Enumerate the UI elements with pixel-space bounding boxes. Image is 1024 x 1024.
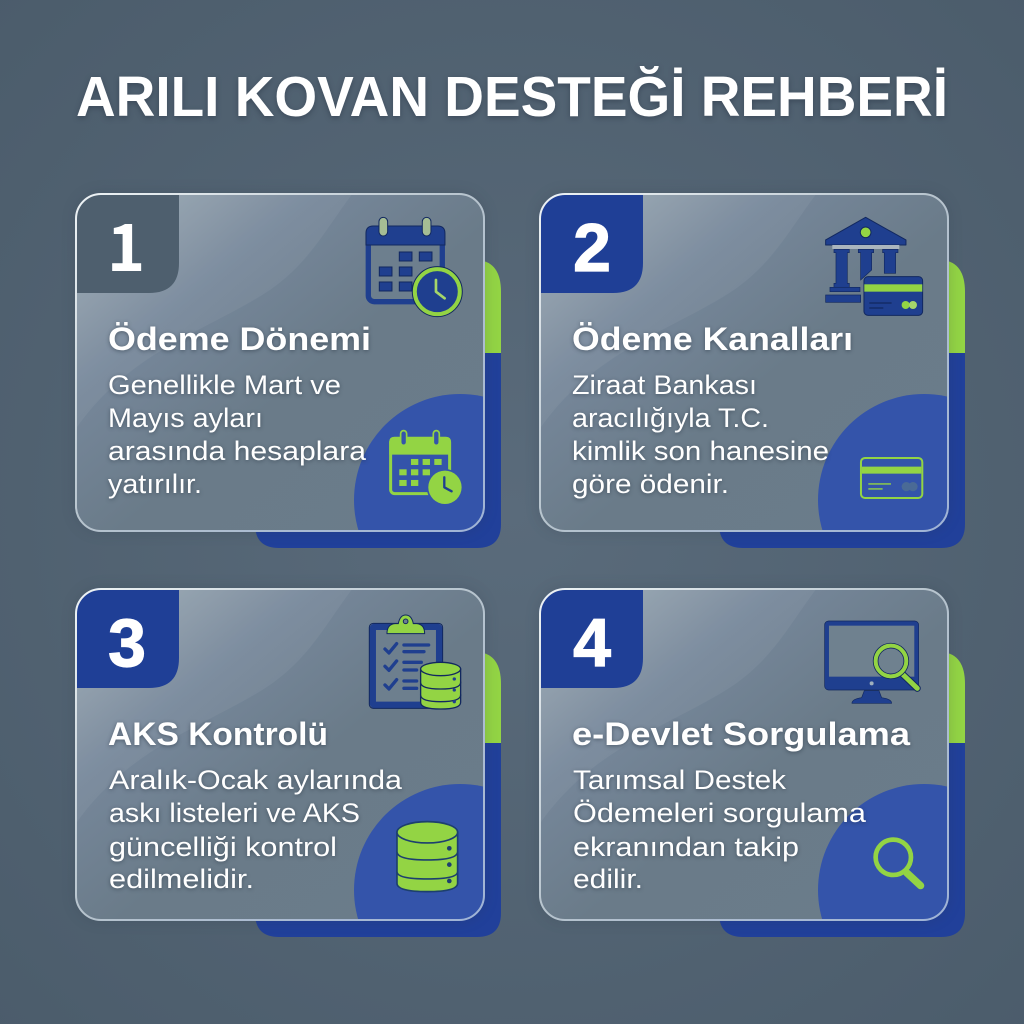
body text 3: güncelliği kontrol xyxy=(109,832,337,862)
decor circle 3 xyxy=(354,784,483,919)
body text 4: Tarımsal Destek xyxy=(573,765,787,795)
body text 4: ekranından takip xyxy=(573,832,799,862)
body text 1: Mayıs ayları xyxy=(108,403,263,433)
decor circle 2 xyxy=(818,394,947,530)
body text 1: arasında hesaplara xyxy=(108,436,366,466)
body text 2 xyxy=(572,370,829,499)
glass card 2 xyxy=(539,193,949,532)
back plate 4 xyxy=(719,652,965,937)
back plate 2 xyxy=(719,260,965,548)
number badge 1 xyxy=(75,193,179,293)
body text 3 xyxy=(109,765,402,894)
body text 3: askı listeleri ve AKS xyxy=(109,798,360,828)
number badge 4 xyxy=(539,588,643,688)
body text 4 xyxy=(573,765,866,894)
icon: green credit card xyxy=(861,458,922,498)
heading 1: Ödeme Dönemi xyxy=(108,321,371,357)
title: ARILI KOVAN DESTEĞİ REHBERİ xyxy=(76,65,948,129)
glass card 4 xyxy=(539,588,949,921)
number badge 1: 1 xyxy=(107,196,145,290)
body text 3: edilmelidir. xyxy=(109,864,254,894)
body text 2: kimlik son hanesine xyxy=(572,436,829,466)
decor circle 1 xyxy=(354,394,483,530)
card border 1 xyxy=(76,194,484,531)
panel: card 4 xyxy=(539,588,965,937)
body text 3: Aralık-Ocak aylarında xyxy=(109,765,402,795)
panel: card 3 xyxy=(75,588,501,937)
glass card 3 xyxy=(75,588,485,921)
icon: clipboard with database xyxy=(369,615,461,709)
body text 1 xyxy=(108,370,366,499)
icon: bank and credit card xyxy=(826,217,923,315)
panel: card 2 xyxy=(539,193,965,548)
heading 2: Ödeme Kanalları xyxy=(572,321,853,357)
body text 2: aracılığıyla T.C. xyxy=(572,403,769,433)
number badge 2 xyxy=(539,193,643,293)
card border 4 xyxy=(540,589,948,920)
number badge 3: 3 xyxy=(108,605,146,681)
heading 3: AKS Kontrolü xyxy=(108,716,328,752)
heading 4: e-Devlet Sorgulama xyxy=(572,716,910,752)
number badge 3 xyxy=(75,588,179,688)
body text 1: yatırılır. xyxy=(108,469,202,499)
body text 2: göre ödenir. xyxy=(572,469,729,499)
icon: green calendar xyxy=(389,431,463,506)
panel: card 1 xyxy=(75,193,501,548)
icon: green magnifier xyxy=(876,840,921,886)
card border 2 xyxy=(540,194,948,531)
back plate 3 xyxy=(255,652,501,937)
icon: monitor with magnifier xyxy=(825,621,919,703)
glass card 1 xyxy=(75,193,485,532)
body text 4: Ödemeleri sorgulama xyxy=(573,798,866,828)
body text 4: edilir. xyxy=(573,864,643,894)
back plate 1 xyxy=(255,260,501,548)
body text 2: Ziraat Bankası xyxy=(572,370,757,400)
card border 3 xyxy=(76,589,484,920)
body text 1: Genellikle Mart ve xyxy=(108,370,341,400)
decor circle 4 xyxy=(818,784,947,919)
icon: green database xyxy=(397,822,458,892)
number badge 4: 4 xyxy=(573,605,611,681)
icon: calendar with clock xyxy=(366,217,462,317)
number badge 2: 2 xyxy=(573,210,611,286)
